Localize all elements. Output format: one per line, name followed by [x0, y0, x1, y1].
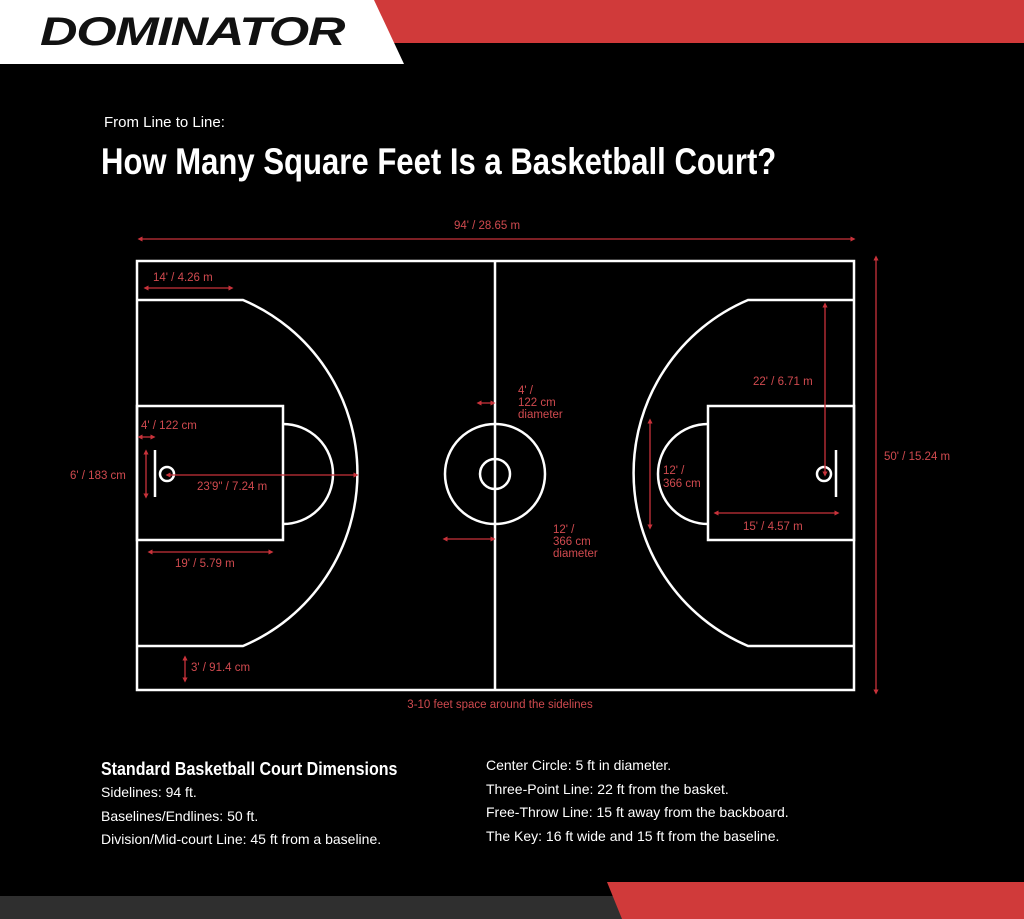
panel: other dimensions list: [486, 757, 789, 844]
dimension labels: 12' /: [663, 465, 685, 477]
footer band: [0, 882, 1024, 919]
dimension labels: [70, 220, 950, 711]
dimension labels: 3-10 feet space around the sidelines: [407, 699, 593, 711]
dimension arrows: [140, 239, 876, 692]
dimension labels: 23'9" / 7.24 m: [197, 481, 267, 493]
dimension labels: 122 cm: [518, 397, 556, 409]
list heading: Standard Basketball Court Dimensions: [101, 759, 397, 779]
panel: other dimensions list: The Key: 16 ft wide and 15 ft from the baseline.: [486, 828, 779, 844]
panel: standard dimensions list: Baselines/Endlines: 50 ft.: [101, 808, 258, 824]
dimension labels: 22' / 6.71 m: [753, 376, 813, 388]
panel: other dimensions list: Center Circle: 5 ft in diameter.: [486, 757, 671, 773]
dimension labels: diameter: [518, 409, 563, 421]
dimension labels: 3' / 91.4 cm: [191, 662, 250, 674]
dimension labels: 366 cm: [553, 536, 591, 548]
dimension labels: 12' /: [553, 524, 575, 536]
dimension labels: 4' /: [518, 385, 534, 397]
title: How Many Square Feet Is a Basketball Court?: [101, 141, 776, 182]
dimension labels: 50' / 15.24 m: [884, 451, 950, 463]
dimension labels: 15' / 4.57 m: [743, 521, 803, 533]
panel: other dimensions list: Three-Point Line: 22 ft from the basket.: [486, 780, 729, 796]
logo: DOMINATOR: DOMINATOR: [40, 10, 344, 54]
dimension labels: diameter: [553, 548, 598, 560]
dimension labels: 4' / 122 cm: [141, 420, 197, 432]
dimension labels: 19' / 5.79 m: [175, 558, 235, 570]
dimension labels: 366 cm: [663, 478, 701, 490]
header band: [0, 0, 1024, 64]
dimension labels: 94' / 28.65 m: [454, 220, 520, 232]
panel: standard dimensions list: Sidelines: 94 ft.: [101, 784, 197, 800]
panel: standard dimensions list: [101, 759, 397, 847]
court lines: [137, 261, 854, 690]
dimension labels: 6' / 183 cm: [70, 470, 126, 482]
panel: standard dimensions list: Division/Mid-court Line: 45 ft from a baseline.: [101, 831, 381, 847]
dimension labels: 14' / 4.26 m: [153, 272, 213, 284]
panel: other dimensions list: Free-Throw Line: 15 ft away from the backboard.: [486, 804, 789, 820]
subtitle: From Line to Line:: [104, 114, 225, 131]
